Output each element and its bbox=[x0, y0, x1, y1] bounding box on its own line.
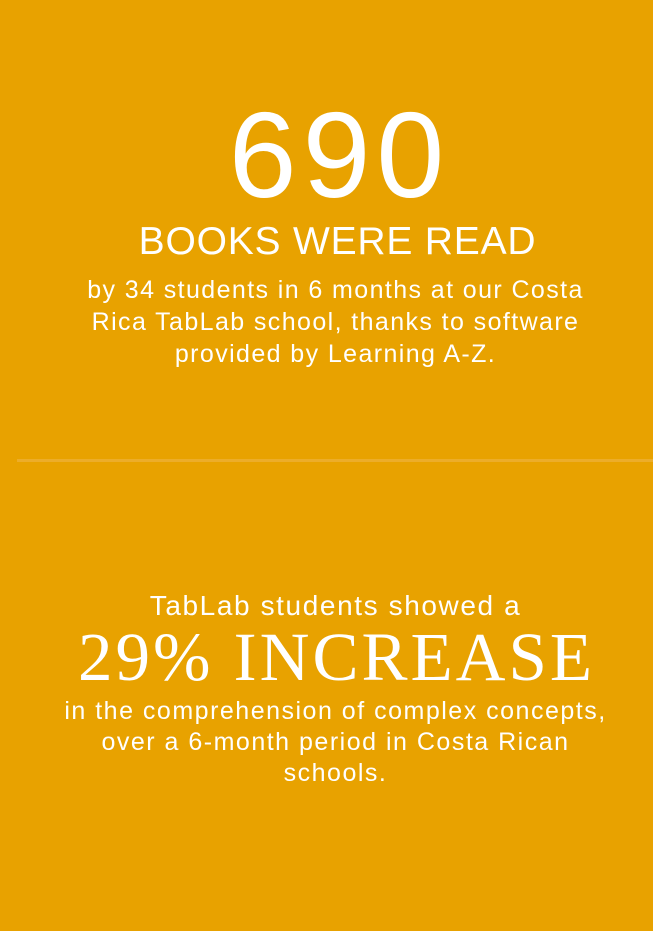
text block: books description: provided by Learning A-Z. bbox=[175, 340, 496, 368]
text block: increase description: in the comprehension of complex concepts, bbox=[64, 697, 607, 725]
heading: books were read: BOOKS WERE READ bbox=[139, 220, 536, 263]
text block: books description: Rica TabLab school, thanks to software bbox=[92, 308, 579, 336]
big number 690: 690 bbox=[229, 87, 450, 223]
text block: increase description bbox=[64, 697, 607, 787]
text block: increase description: over a 6-month period in Costa Rican bbox=[101, 728, 570, 756]
text block: increase description: schools. bbox=[284, 759, 387, 787]
text block: books description: by 34 students in 6 months at our Costa bbox=[87, 276, 584, 304]
text block: books description bbox=[87, 276, 584, 368]
heading: 29% increase: 29% INCREASE bbox=[78, 619, 595, 695]
divider bbox=[17, 459, 653, 462]
text: intro line: TabLab students showed a bbox=[150, 590, 521, 621]
